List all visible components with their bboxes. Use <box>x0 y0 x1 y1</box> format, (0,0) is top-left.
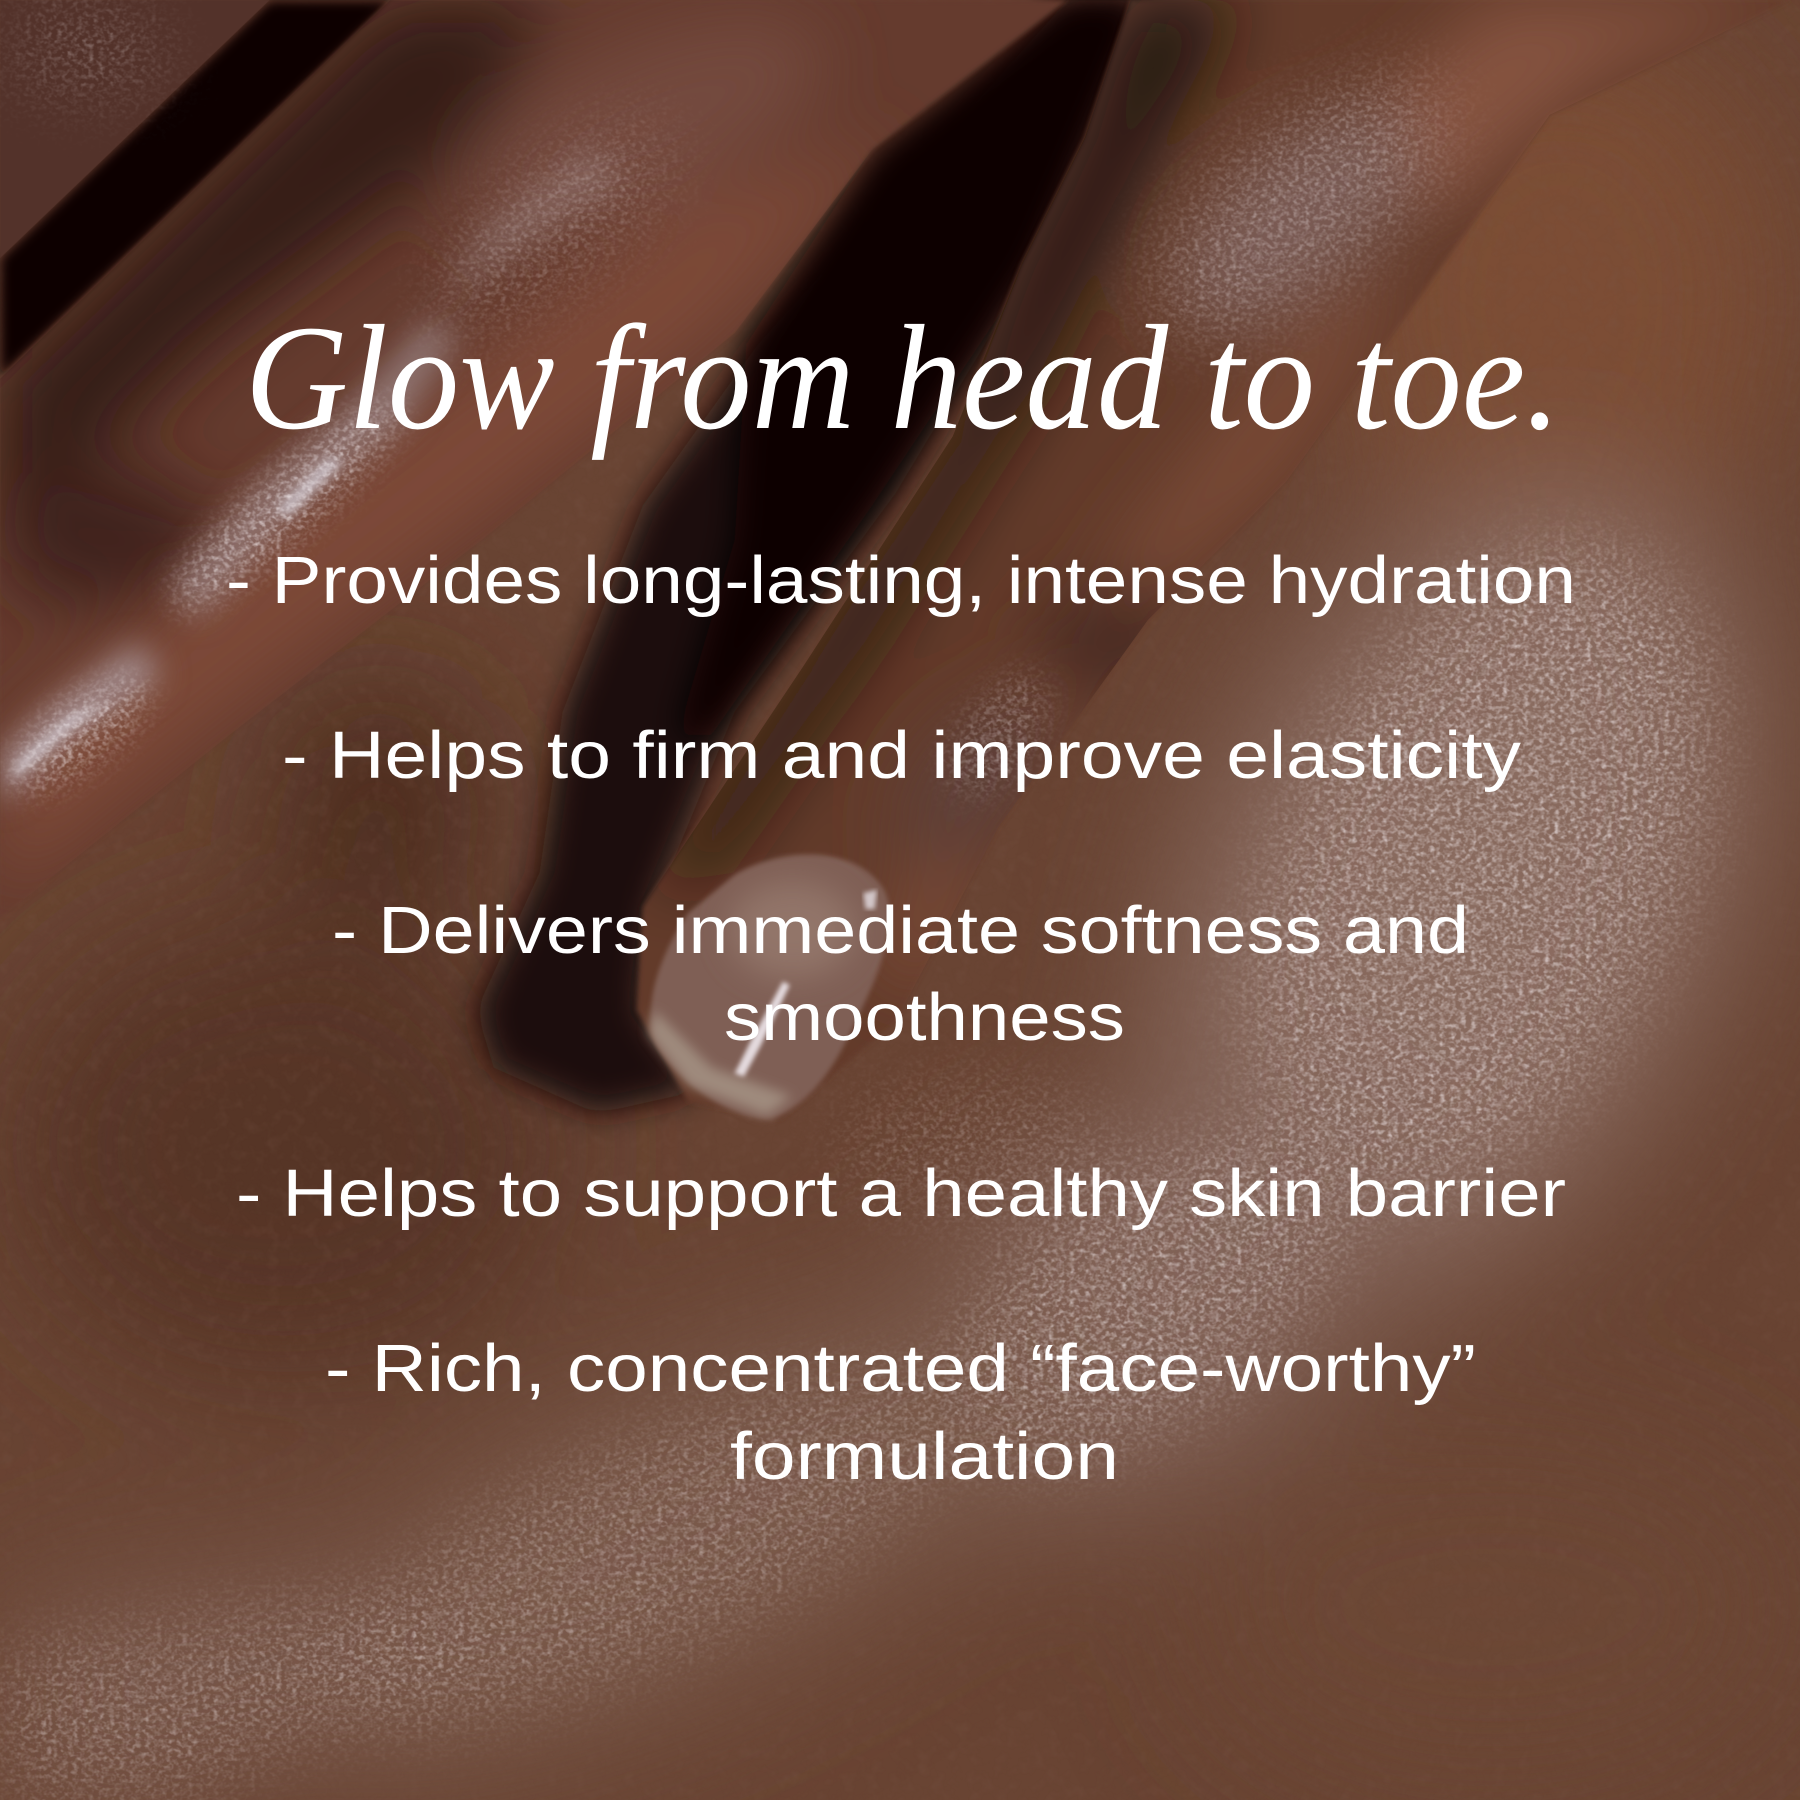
benefit: firmness and elasticity: - Helps to firm and improve elasticity <box>282 718 1522 793</box>
shadow <box>476 0 1148 1114</box>
benefit: softness and smoothness: - Delivers immediate softness and <box>332 893 1469 968</box>
benefit: softness and smoothness <box>332 893 1469 1055</box>
finger 1 <box>0 0 1068 918</box>
benefit: face-worthy formulation: - Rich, concentrated “face-worthy” <box>325 1331 1476 1406</box>
benefit: healthy skin barrier: - Helps to support a healthy skin barrier <box>236 1156 1566 1231</box>
benefit: face-worthy formulation <box>325 1331 1476 1494</box>
benefit: softness and smoothness: smoothness <box>724 980 1125 1055</box>
finger 2 <box>637 0 1791 1119</box>
title: Glow from head to toe. <box>245 295 1561 461</box>
benefit: face-worthy formulation: formulation <box>730 1419 1119 1494</box>
dark gap top left <box>0 0 396 379</box>
nail <box>649 854 889 1119</box>
benefit: long-lasting hydration: - Provides long-lasting, intense hydration <box>226 543 1576 618</box>
